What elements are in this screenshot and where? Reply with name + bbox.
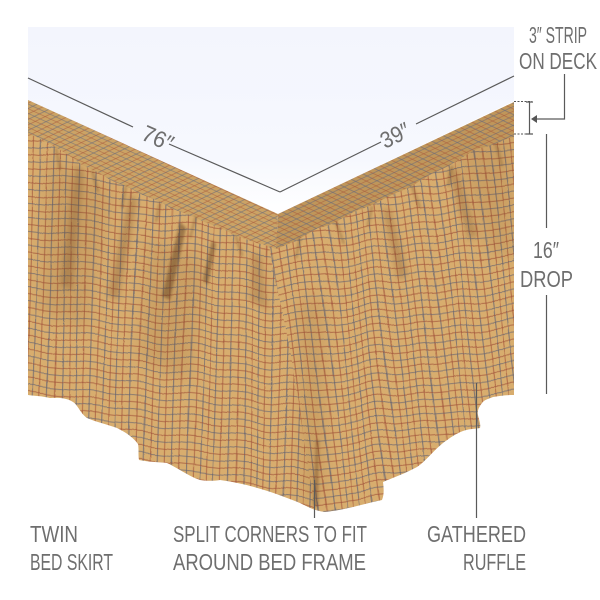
fold shadows [40, 130, 514, 508]
label: twin bed skirt: BED SKIRT [30, 549, 113, 575]
gather wrinkles [56, 144, 502, 258]
label: split corners: SPLIT CORNERS TO FIT [173, 521, 367, 547]
label: gathered ruffle: RUFFLE [463, 549, 526, 575]
dimension: 16 inch drop [520, 134, 573, 394]
dimension: 16 inch drop: DROP [520, 266, 573, 292]
bed skirt fabric [28, 100, 514, 512]
deck strip left [28, 100, 278, 249]
white mattress top [28, 27, 514, 214]
label: split corners: AROUND BED FRAME [173, 549, 366, 575]
dimension: 39 inch width: 39″ [376, 117, 414, 153]
deck strip right [276, 102, 514, 249]
dimension: 39 inch width [280, 76, 514, 192]
arrow: strip callout and bracket [514, 74, 564, 134]
pointer: gathered ruffle [476, 383, 478, 518]
dimension: 76 inch length: 76″ [138, 120, 178, 157]
label: twin bed skirt [30, 521, 113, 575]
skirt plaid panels [28, 136, 514, 512]
label: split corners [173, 521, 367, 575]
dimension: 76 inch length [28, 78, 280, 192]
dimension: 16 inch drop: 16″ [533, 237, 559, 263]
label: gathered ruffle: GATHERED [427, 521, 526, 547]
label: twin bed skirt: TWIN [30, 521, 78, 547]
label: gathered ruffle [427, 521, 526, 575]
pointer: split corner [314, 480, 316, 518]
label: 3 inch strip on deck [519, 22, 597, 74]
